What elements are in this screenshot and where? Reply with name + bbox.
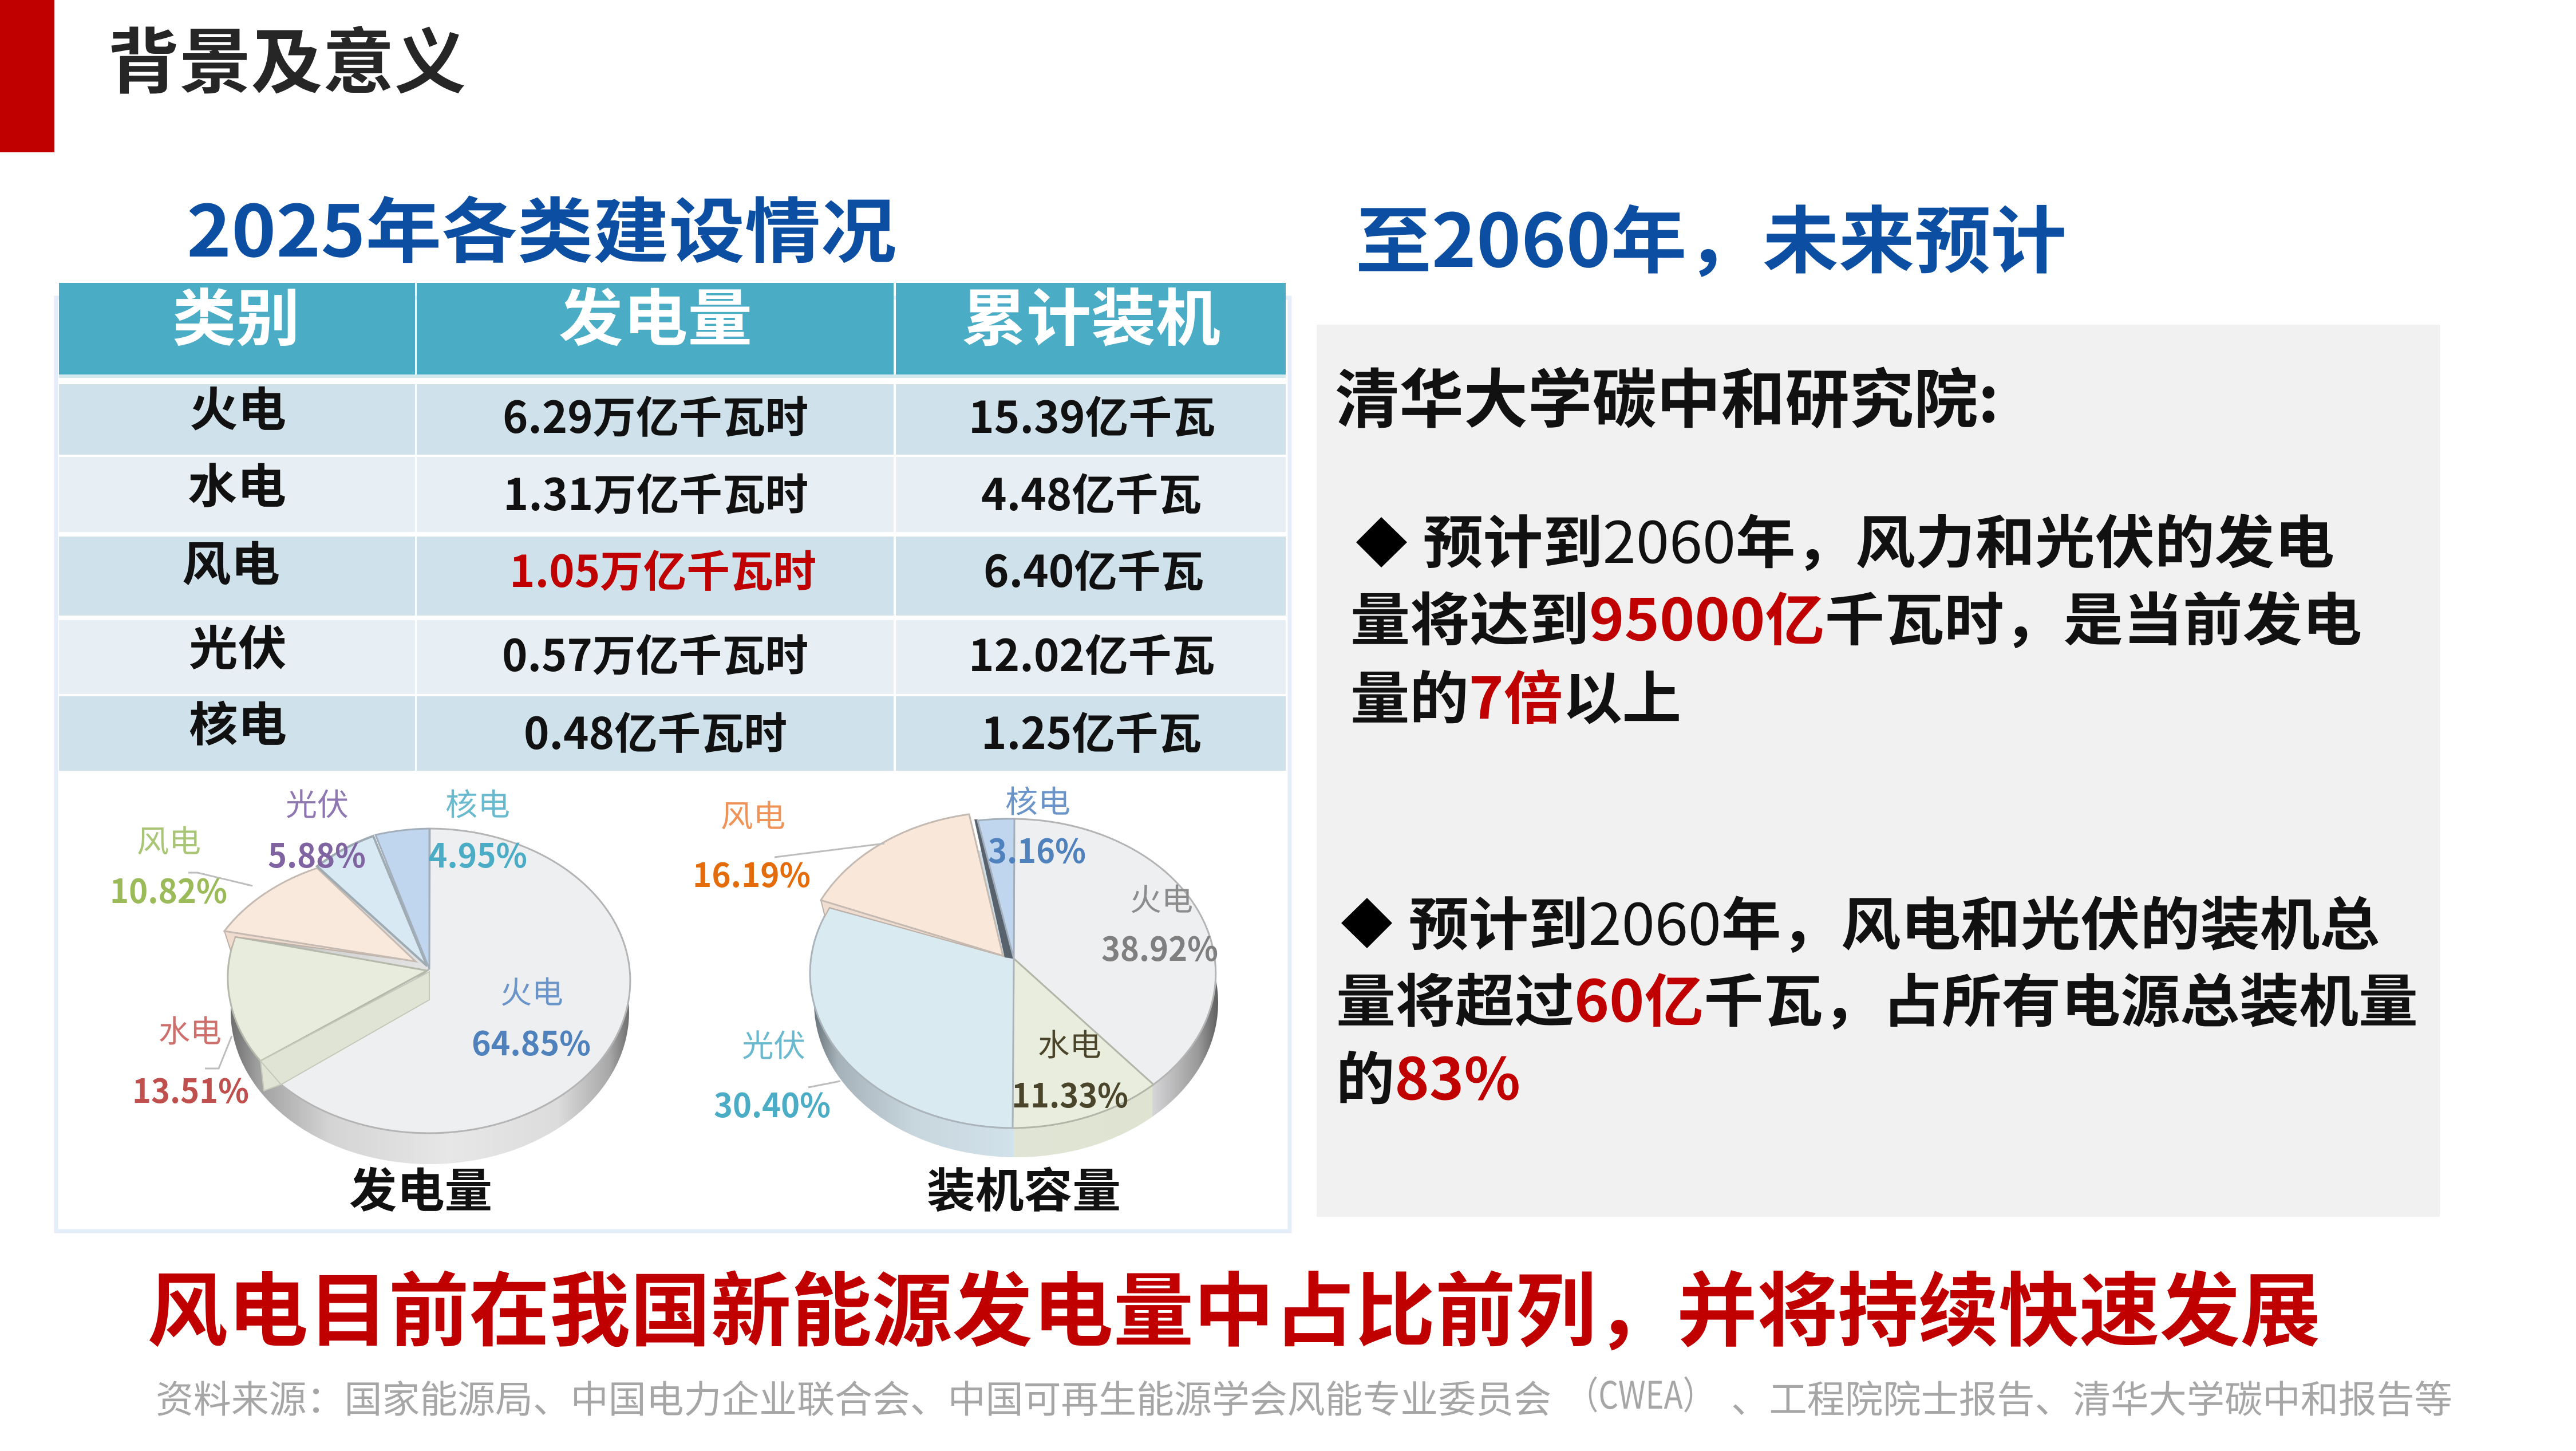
slice: hydro 13.51% — [228, 937, 429, 1091]
label: hydro: 13.51% — [132, 1064, 249, 1113]
forecast text: capacity: 量将超过60亿千瓦，占所有电源总装机量 — [1336, 955, 2418, 1038]
table row: thermal: 火电 — [189, 372, 286, 440]
label: solar — [268, 779, 366, 877]
table row: thermal — [59, 372, 1286, 455]
table row: hydro: 1.31万亿千瓦时 — [503, 460, 808, 523]
forecast text: generation: 量的7倍以上 — [1350, 652, 1681, 735]
label: thermal — [472, 967, 591, 1065]
chart title: generation: 发电量 — [349, 1153, 492, 1221]
label: hydro: 水电 — [159, 1006, 222, 1051]
label: thermal: 火电 — [500, 967, 563, 1012]
table header row: 累计装机 — [962, 269, 1220, 358]
label: nuclear: 核电 — [445, 779, 510, 825]
source note: 、工程院院士报告、清华大学碳中和报告等 — [1731, 1369, 2452, 1424]
label: thermal: 火电 — [1130, 874, 1193, 920]
forecast text: generation — [1350, 496, 2362, 735]
pie side wall — [231, 859, 629, 1164]
table row: wind: 6.40亿千瓦 — [983, 537, 1204, 600]
slice: nuclear 3.16% — [974, 819, 1014, 959]
label: nuclear: 核电 — [1005, 776, 1070, 822]
label: wind: 风电 — [721, 791, 785, 836]
forecast text: capacity: 的83% — [1336, 1033, 1520, 1116]
label: wind: 16.19% — [693, 849, 811, 897]
label: wind: 10.82% — [110, 865, 227, 913]
icon: diamond bullet — [1356, 517, 1407, 567]
table row: nuclear: 0.48亿千瓦时 — [524, 699, 787, 762]
label: nuclear: 3.16% — [988, 825, 1086, 873]
slice: wind 10.82% — [224, 868, 416, 961]
panel: 2060 forecast — [1317, 325, 2440, 1217]
label: thermal: 38.92% — [1101, 922, 1218, 971]
table header row: 类别 — [172, 269, 300, 358]
pie chart: generation share — [110, 779, 630, 1221]
table row: thermal: 6.29万亿千瓦时 — [503, 383, 808, 445]
label: solar: 5.88% — [268, 829, 366, 877]
leader lines — [188, 873, 252, 1068]
table row: nuclear: 核电 — [189, 687, 287, 755]
label: solar: 光伏 — [286, 779, 349, 825]
table row: wind: 1.05万亿千瓦时 — [509, 537, 816, 600]
forecast text: capacity — [1336, 878, 2418, 1116]
slice: thermal 64.85% — [281, 829, 630, 1133]
table row: hydro: 4.48亿千瓦 — [981, 460, 1202, 523]
label: hydro — [1012, 1020, 1128, 1117]
table header row — [59, 269, 1286, 378]
source note: （CWEA） — [1567, 1365, 1714, 1420]
table row: nuclear — [59, 687, 1286, 771]
label: thermal: 64.85% — [472, 1017, 591, 1065]
slice: wind 16.19% — [821, 814, 1008, 957]
label: wind — [693, 791, 811, 897]
label: hydro: 11.33% — [1012, 1069, 1128, 1117]
leader lines — [775, 843, 884, 1087]
slice: solar 30.40% — [810, 908, 1014, 1128]
table: 2025 construction by type — [59, 269, 1286, 771]
panel: 2025 construction outline — [56, 298, 1290, 1231]
left heading: 2025年各类建设情况 — [187, 174, 896, 277]
source note: 资料来源：国家能源局、中国电力企业联合会、中国可再生能源学会风能专业委员会 — [156, 1369, 1551, 1424]
label: hydro: 水电 — [1038, 1020, 1101, 1065]
table row: solar — [59, 610, 1286, 694]
table row: wind — [59, 526, 1286, 616]
table row: wind: 风电 — [182, 526, 280, 594]
pie chart: installed capacity share — [693, 776, 1218, 1221]
page title: 背景及意义 — [108, 5, 466, 108]
slice: hydro 11.33% — [1013, 959, 1153, 1128]
label: nuclear — [428, 779, 527, 877]
table row: solar: 0.57万亿千瓦时 — [502, 621, 808, 684]
table row: nuclear: 1.25亿千瓦 — [981, 699, 1202, 762]
table row: hydro: 水电 — [188, 448, 286, 516]
label: wind: 风电 — [137, 816, 201, 861]
icon: diamond bullet — [1341, 898, 1392, 948]
forecast text: capacity: 预计到2060年，风电和光伏的装机总 — [1409, 878, 2380, 961]
red accent bar — [0, 0, 54, 152]
right heading: 至2060年，未来预计 — [1356, 182, 2067, 288]
table row: solar: 12.02亿千瓦 — [969, 621, 1215, 684]
slice: thermal 38.92% — [1014, 819, 1216, 1085]
label: solar — [714, 1020, 831, 1127]
forecast text: generation: 预计到2060年，风力和光伏的发电 — [1423, 496, 2334, 579]
label: nuclear: 4.95% — [428, 829, 527, 877]
label: wind — [110, 816, 227, 913]
chart title: capacity: 装机容量 — [927, 1153, 1121, 1221]
label: solar: 30.40% — [714, 1079, 831, 1127]
table row: solar: 光伏 — [189, 610, 287, 679]
source note — [156, 1365, 2452, 1424]
table row: hydro — [59, 448, 1286, 532]
slice: nuclear 4.95% — [376, 829, 429, 969]
conclusion headline: 风电目前在我国新能源发电量中占比前列，并将持续快速发展 — [147, 1245, 2321, 1363]
table row: thermal: 15.39亿千瓦 — [969, 383, 1215, 445]
table header row: 发电量 — [559, 269, 752, 358]
label: solar: 光伏 — [742, 1020, 805, 1066]
slice: solar 5.88% — [317, 836, 427, 966]
panel heading: 清华大学碳中和研究院: — [1335, 348, 1999, 441]
label: hydro — [132, 1006, 249, 1113]
pie side wall — [814, 848, 1218, 1157]
label: nuclear — [988, 776, 1086, 873]
forecast text: generation: 量将达到95000亿千瓦时，是当前发电 — [1350, 574, 2362, 657]
label: thermal — [1101, 874, 1218, 971]
